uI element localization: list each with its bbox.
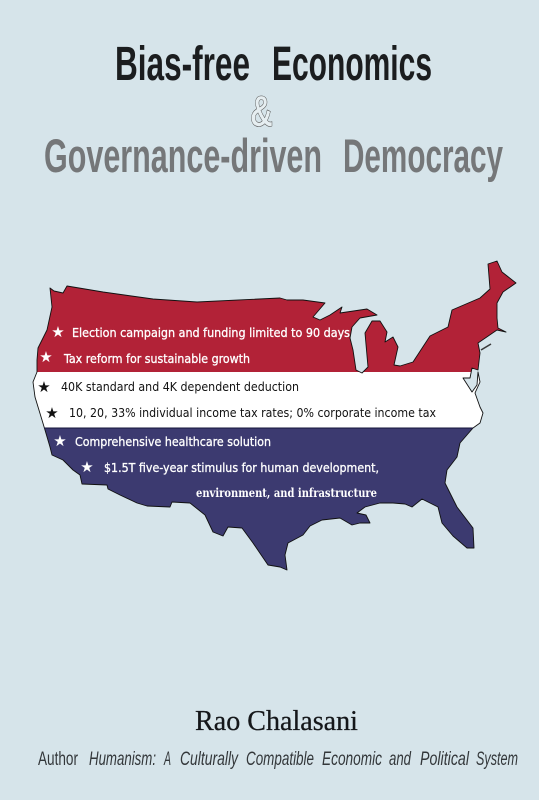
map band: red: [37, 262, 516, 372]
bullet: deductions: 40K standard and 4K dependent deduction: [61, 380, 299, 394]
bullet: tax reform: ★: [39, 348, 53, 366]
bullet: deductions: ★: [37, 378, 51, 396]
title: Bias-free Economics: [115, 38, 432, 91]
map band: white: [34, 372, 482, 428]
bullet: income tax rates: ★: [45, 404, 59, 422]
map of the United States in flag bands: [32, 260, 516, 570]
author credit: and: [389, 749, 412, 770]
title: Bias-free Economics: Economics: [272, 38, 432, 91]
bullet: deductions: [37, 378, 299, 396]
title: Bias-free Economics: Bias-free: [115, 38, 250, 91]
author credit: System: [476, 749, 518, 770]
author name: Rao Chalasani: [195, 706, 358, 737]
author credit: Author: [38, 749, 78, 770]
title: ampersand: &: [250, 87, 273, 136]
bullet: healthcare: Comprehensive healthcare solution: [75, 435, 271, 449]
map outline: [33, 261, 516, 570]
bullet: stimulus: environment, and infrastructure: [196, 486, 377, 500]
bullet: stimulus: [80, 458, 379, 500]
map band: blue: [45, 428, 474, 570]
author credit: Culturally: [180, 749, 239, 770]
long island: [481, 344, 491, 350]
bullet: stimulus: ★: [80, 458, 94, 476]
bullet: tax reform: [39, 348, 250, 366]
bullet: income tax rates: 10, 20, 33% individual income tax rates; 0% corporate income tax: [69, 406, 436, 420]
bullet: stimulus: $1.5T five-year stimulus for human development,: [104, 461, 379, 475]
bullet: tax reform: Tax reform for sustainable growth: [63, 352, 250, 366]
band divider: [44, 427, 473, 429]
bullet: election campaign: Election campaign and funding limited to 90 days: [72, 326, 350, 340]
bullet: healthcare: [53, 432, 271, 450]
title: Governance-driven Democracy: Governance-driven: [44, 129, 322, 182]
author credit: Economic: [322, 749, 382, 770]
bullet: election campaign: ★: [51, 323, 65, 341]
bullet: income tax rates: [45, 404, 436, 422]
author credit: Humanism:: [89, 749, 156, 770]
author credit: Political: [420, 749, 470, 770]
author credit: Compatible: [246, 749, 314, 770]
author credit: [38, 749, 518, 770]
bullet: election campaign: [51, 323, 350, 341]
author credit: A: [163, 749, 171, 770]
bullet: healthcare: ★: [53, 432, 67, 450]
